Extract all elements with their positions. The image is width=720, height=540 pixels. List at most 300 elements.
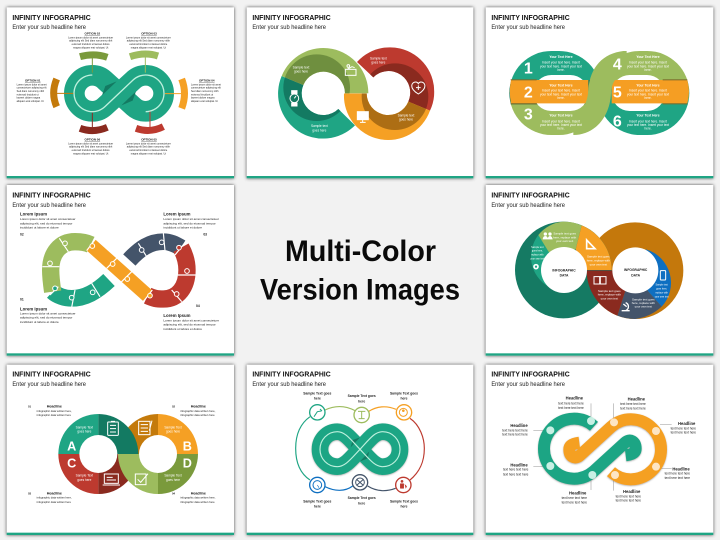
headline 01: infographic data written here, xyxy=(37,409,72,413)
icon: clipboard xyxy=(108,421,118,435)
node labels: Sample Text goes xyxy=(348,496,376,500)
headline bottom left xyxy=(562,491,587,505)
slide 8: headline loops xyxy=(486,365,713,535)
segment labels: Sample Text xyxy=(76,426,93,430)
headline bottom left: text here text here xyxy=(562,501,587,505)
headline 04: 04 xyxy=(172,491,176,495)
headline top right: Headline xyxy=(628,397,646,402)
text block 5: Insert your text here. Insert xyxy=(629,89,667,93)
node labels: Sample Text goes xyxy=(348,394,376,398)
node labels: here xyxy=(358,501,365,505)
side segment text: Sample text xyxy=(531,246,544,249)
text block 6: here. xyxy=(644,127,652,131)
headline 02: infographic data written here xyxy=(180,413,215,417)
icon: target xyxy=(534,265,538,269)
headline bottom left: text here text here xyxy=(562,496,587,500)
segment: green xyxy=(538,222,582,252)
side segment text: replace with xyxy=(531,254,544,257)
block 01 text xyxy=(20,298,76,324)
node labels: Sample Text goes xyxy=(390,391,418,395)
side segment text: goes here, xyxy=(656,287,668,290)
slide 1: option infinity xyxy=(7,7,234,178)
segment text: here, replace with xyxy=(632,301,655,305)
headline 04: infographic data written here xyxy=(180,500,215,504)
segment labels: goes here xyxy=(166,478,180,482)
title: INFINITY INFOGRAPHIC xyxy=(252,13,331,22)
leader lines xyxy=(533,403,672,491)
text block 2 xyxy=(540,83,582,100)
side segment text: your own text xyxy=(655,296,669,299)
node labels: here xyxy=(314,505,321,509)
headline bottom right: Headline xyxy=(623,489,641,494)
letters: C xyxy=(67,457,76,471)
slide 5: infographic data rings xyxy=(486,185,713,356)
block 04 text: Lorem Ipsum xyxy=(163,313,191,318)
loop holes xyxy=(533,75,665,111)
text block 3: here. xyxy=(557,127,565,131)
centre holes xyxy=(541,247,658,293)
node labels: here xyxy=(358,399,365,403)
infinity ribbon xyxy=(320,432,400,467)
text block 6: Your Text Here xyxy=(636,114,660,118)
option 02 text: euismod tincidunt ut laoreet dolore xyxy=(72,43,110,46)
option 02 text: magna aliquam erat volutpat. Ut xyxy=(73,46,109,49)
segment text: Sample text goes xyxy=(587,255,610,259)
option 06 text: Lorem ipsum dolor sit amet consectetuer xyxy=(68,142,113,145)
segment labels: Sample text xyxy=(398,113,414,117)
headline upper left xyxy=(502,423,528,437)
text block 3: Your Text Here xyxy=(549,114,573,118)
icon: monitor xyxy=(103,474,120,485)
option 06 text: euismod tincidunt ut laoreet dolore xyxy=(72,149,110,152)
hole labels: INFOGRAPHIC xyxy=(624,268,648,272)
slide 6: ABCD infinity xyxy=(7,365,234,535)
segment labels: goes here xyxy=(371,61,386,65)
option 03 text: adipiscing elit Sed diam nonummy nibh xyxy=(127,40,170,43)
option 06 text: magna aliquam erat volutpat. Ut xyxy=(73,152,109,155)
side segment text: goes here, xyxy=(532,250,543,253)
title: INFINITY INFOGRAPHIC xyxy=(12,191,91,200)
headline bottom right: text here text here xyxy=(616,499,641,503)
side segment text: replace with xyxy=(655,292,669,295)
option 04 text: laoreet dolore magna xyxy=(191,97,215,100)
orange bands xyxy=(510,80,689,103)
arrow option 05 xyxy=(136,112,163,130)
headline 03: infographic data written here, xyxy=(37,496,72,500)
option 02 text: OPTION 02 xyxy=(85,32,100,36)
option 02 text: Lorem ipsum dolor sit amet consectetuer xyxy=(68,36,113,39)
hole labels: DATA xyxy=(560,273,569,277)
headline 01: Headline xyxy=(47,404,62,408)
icon: notes xyxy=(139,421,152,435)
headline lower right: Headline xyxy=(672,466,690,471)
segment: blue xyxy=(635,249,671,307)
title: INFINITY INFOGRAPHIC xyxy=(491,13,570,22)
text block 6 xyxy=(627,114,669,131)
option 02 text xyxy=(68,32,113,49)
centre holes xyxy=(79,435,177,473)
icon: desk xyxy=(345,65,356,75)
infinity ribbon xyxy=(74,75,164,112)
icon: people xyxy=(543,232,553,239)
option 05 text: Lorem ipsum dolor sit amet consectetuer xyxy=(126,142,171,145)
headline 03: 03 xyxy=(28,491,32,495)
option 01 text: euismod tincidunt ut xyxy=(17,93,39,96)
subtitle: Enter your sub headline here xyxy=(491,24,565,31)
text block 2: Insert your text here. Insert xyxy=(542,89,580,93)
hole labels xyxy=(552,268,648,277)
title: INFINITY INFOGRAPHIC xyxy=(12,13,91,22)
quarter: dark red xyxy=(98,454,138,494)
block 01 text: adipiscing elit, sed do eiusmod tempor xyxy=(20,316,72,320)
puzzle knobs xyxy=(48,240,189,300)
subtitle: Enter your sub headline here xyxy=(252,24,326,31)
block 04 text: Lorem ipsum dolor sit amet consectetuer xyxy=(163,318,219,322)
subtitle: Enter your sub headline here xyxy=(491,381,565,388)
text block 3: Insert your text here. Insert xyxy=(542,119,580,123)
quarter: light green xyxy=(118,454,158,494)
option 04 text: Lorem ipsum dolor sit amet xyxy=(191,83,221,86)
node: machine xyxy=(354,407,369,423)
headline 03 xyxy=(28,491,72,504)
segment text xyxy=(553,231,655,309)
block 02 text: incididunt ut labore et dolore xyxy=(20,226,59,230)
option 05 text xyxy=(126,138,171,155)
text block 1: here. xyxy=(557,68,565,72)
segment: orange xyxy=(576,225,612,270)
side segment text: Sample text xyxy=(656,284,668,287)
block 01 text: Lorem Ipsum xyxy=(20,306,47,311)
headline 01: infographic data written here xyxy=(37,413,71,417)
arrow option 01 xyxy=(54,79,73,107)
icon: monitor xyxy=(357,112,368,122)
option 04 text: aliquam erat volutpat. Ut xyxy=(191,100,218,103)
headline top left xyxy=(558,396,584,410)
node labels xyxy=(303,391,418,509)
segment labels: Sample text xyxy=(293,65,309,69)
block 03 text: Lorem Ipsum xyxy=(163,212,191,217)
headline top right xyxy=(620,397,646,411)
band shading xyxy=(511,79,687,104)
segment labels: Sample text xyxy=(370,57,387,61)
headline top right: text here text here xyxy=(620,402,646,406)
icon: ruler triangle xyxy=(587,240,595,249)
segment text: here, replace with xyxy=(553,235,577,239)
option 04 text: consectetuer adipiscing elit xyxy=(191,87,221,90)
block 03 text: Lorem ipsum dolor sit amet consectetuer xyxy=(163,217,219,221)
option 06 text xyxy=(68,138,113,155)
text block 5: your text here. Insert your text xyxy=(627,92,669,96)
node: gauge xyxy=(310,477,325,493)
headline lower left: text here text here xyxy=(503,472,529,476)
quarter: red xyxy=(58,454,98,494)
node labels: Sample Text goes xyxy=(303,500,332,504)
text block 4: Your Text Here xyxy=(636,55,660,59)
puzzle ribbon xyxy=(42,233,196,307)
headline 01: 01 xyxy=(28,404,32,408)
headline 04 xyxy=(172,491,216,504)
block 02 text: adipiscing elit, sed do eiusmod tempor xyxy=(20,221,72,225)
option 06 text: adipiscing elit Sed diam nonummy nibh xyxy=(69,146,113,149)
segment: slate xyxy=(617,271,662,319)
headline top left: Headline xyxy=(566,396,584,401)
option 05 text: adipiscing elit Sed diam nonummy nibh xyxy=(127,146,170,149)
headline 03: infographic data written here xyxy=(37,500,71,504)
text block 2: Your Text Here xyxy=(549,83,573,87)
block 02 text xyxy=(20,212,76,237)
option 01 text: consectetuer adipiscing elit xyxy=(17,87,47,90)
node labels: here xyxy=(314,396,321,400)
subtitle: Enter your sub headline here xyxy=(12,202,86,209)
title: INFINITY INFOGRAPHIC xyxy=(491,191,570,200)
text block 1 xyxy=(540,55,582,72)
slide 2: four segment infinity xyxy=(247,7,473,178)
node labels: Sample Text goes xyxy=(390,500,418,504)
headline 04: infographic data written here, xyxy=(180,496,216,500)
segment text: here, replace with xyxy=(598,293,621,297)
headline upper right xyxy=(671,421,696,435)
headline 03: Headline xyxy=(47,491,62,495)
centre caption xyxy=(260,235,460,306)
node: gears xyxy=(352,475,368,490)
node labels: here xyxy=(400,505,408,509)
right loop xyxy=(604,51,690,135)
headline bottom right xyxy=(616,489,641,503)
option 01 text: aliquam erat volutpat. Ut xyxy=(17,100,44,103)
hole labels: DATA xyxy=(631,273,641,277)
headline top right: text here text here xyxy=(620,407,646,411)
option 02 text: adipiscing elit Sed diam nonummy nibh xyxy=(69,40,113,43)
headline top left: text here text here xyxy=(558,401,584,405)
segment text: Sample text goes xyxy=(553,231,576,235)
text block 4: Insert your text here. Insert xyxy=(629,61,667,65)
headline bottom left: Headline xyxy=(569,491,587,496)
numbers: 5 xyxy=(613,85,622,102)
segment text: Sample text goes xyxy=(632,297,655,301)
headline lower right: text here text here xyxy=(665,471,690,475)
orange ribbon xyxy=(569,419,661,479)
icon: phone xyxy=(660,271,666,280)
block 04 text xyxy=(163,304,219,331)
centre caption: Version Images xyxy=(260,274,460,306)
node labels: here xyxy=(400,396,408,400)
segment labels xyxy=(293,57,414,132)
arrow option 04 xyxy=(165,79,184,108)
option 05 text: euismod tincidunt ut laoreet dolore xyxy=(129,149,168,152)
headline 02: 02 xyxy=(172,404,176,408)
headline 02: Headline xyxy=(191,404,206,408)
segment labels: Sample text xyxy=(311,124,328,128)
headline lower left xyxy=(503,462,529,476)
block 01 text: 01 xyxy=(20,298,24,302)
segment labels: goes here xyxy=(399,117,413,121)
block 04 text: adipiscing elit, sed do eiusmod tempor xyxy=(163,323,216,327)
segment: dark red xyxy=(587,270,635,316)
text block 6: Insert your text here. Insert xyxy=(629,119,667,123)
headline top left: text here text here xyxy=(558,406,584,410)
segment labels: Sample Text xyxy=(164,474,182,478)
segment labels: goes here xyxy=(294,70,308,74)
icon: watch xyxy=(290,91,299,106)
numbers xyxy=(524,56,622,131)
headline lower left: text here text here xyxy=(503,468,529,472)
segment labels: goes here xyxy=(166,430,180,434)
headline upper right: Headline xyxy=(678,421,696,426)
s-curve band xyxy=(573,51,627,135)
option 03 text: Lorem ipsum dolor sit amet consectetuer xyxy=(126,36,171,39)
left loop xyxy=(509,51,594,135)
block 02 text: Lorem ipsum dolor sit amet consectetuer xyxy=(20,217,76,221)
headline 04: Headline xyxy=(191,491,206,495)
segment labels: goes here xyxy=(312,128,327,132)
segment text: your own text xyxy=(601,296,618,300)
centre caption: Multi-Color xyxy=(285,235,436,268)
option 03 text: magna aliquam erat volutpat. Ut xyxy=(131,46,166,49)
headline upper left: text here text here xyxy=(502,428,528,432)
text block 4: here. xyxy=(644,68,652,72)
headline lower right xyxy=(665,466,690,480)
title: INFINITY INFOGRAPHIC xyxy=(252,370,331,379)
text block 4: your text here. Insert your text xyxy=(627,64,669,68)
option 04 text: OPTION 04 xyxy=(199,79,215,83)
segment labels: Sample Text xyxy=(164,426,182,430)
numbers: 4 xyxy=(613,56,622,73)
segment labels: goes here xyxy=(77,430,92,434)
headline upper left: Headline xyxy=(510,423,528,428)
headline lower right: text here text here xyxy=(665,476,690,480)
option 01 text xyxy=(17,79,47,103)
option 04 text xyxy=(191,79,221,103)
option 01 text: OPTION 01 xyxy=(25,79,41,83)
text block 2: here. xyxy=(557,96,565,100)
segment labels: goes here xyxy=(77,478,92,482)
ribbon dots xyxy=(546,417,660,479)
block 01 text: incididunt ut labore et dolore xyxy=(20,320,59,324)
numbers: 1 xyxy=(524,61,533,78)
headline upper right: text here text here xyxy=(671,426,696,430)
icon: microscope xyxy=(622,303,630,311)
text block 4 xyxy=(627,55,669,72)
hole labels: INFOGRAPHIC xyxy=(552,269,576,273)
block 03 text: 03 xyxy=(203,233,207,237)
subtitle: Enter your sub headline here xyxy=(252,381,326,388)
option 05 text: magna aliquam erat volutpat. Ut xyxy=(131,152,166,155)
arrow option 03 xyxy=(130,54,158,73)
arrow option 02 xyxy=(80,55,107,73)
option 01 text: Lorem ipsum dolor sit amet xyxy=(17,83,47,86)
slide 3: numbered infinity xyxy=(486,7,713,178)
segment text: your own text xyxy=(635,305,652,309)
quarter: dark teal xyxy=(98,414,138,454)
subtitle: Enter your sub headline here xyxy=(491,202,565,209)
segment: teal xyxy=(278,76,355,139)
arrow option 06 xyxy=(80,113,107,131)
text block 5: here. xyxy=(644,96,652,100)
text block 6: your text here. Insert your text xyxy=(627,123,669,127)
subtitle: Enter your sub headline here xyxy=(12,381,86,388)
option 03 text: OPTION 03 xyxy=(141,32,157,36)
ring: amber xyxy=(587,222,683,319)
block 04 text: incididunt ut labore et dolore xyxy=(163,327,202,331)
text block 1: Insert your text here. Insert xyxy=(542,61,580,65)
quarter: amber xyxy=(158,414,198,454)
icon: check box xyxy=(135,474,148,485)
segment text: here, replace with xyxy=(587,258,610,262)
option 06 text: OPTION 06 xyxy=(85,138,100,142)
quarter: teal xyxy=(58,414,98,454)
headline upper left: text here text here xyxy=(502,433,528,437)
segment text: your own text xyxy=(556,239,574,243)
quarter: olive xyxy=(158,454,198,494)
headline 02: infographic data written here, xyxy=(180,409,216,413)
headline upper right: text here text here xyxy=(671,431,696,435)
slide 4: puzzle infinity xyxy=(7,185,234,356)
block 03 text xyxy=(163,212,219,237)
option 04 text: Sed diam nonummy nibh xyxy=(191,90,219,93)
letters xyxy=(67,439,192,471)
block 02 text: 02 xyxy=(20,233,24,237)
icon: book xyxy=(594,277,606,284)
letters: B xyxy=(183,439,192,453)
option 05 text: OPTION 05 xyxy=(141,138,157,142)
segment text: Sample text goes xyxy=(598,289,621,293)
block 01 text: Lorem ipsum dolor sit amet consectetuer xyxy=(20,312,76,316)
connector curves xyxy=(296,407,424,491)
segment text: your own text xyxy=(590,262,607,266)
segment: green xyxy=(282,48,368,94)
numbers: 6 xyxy=(613,114,622,131)
text block 3 xyxy=(540,114,582,131)
text block 1: your text here. Insert your text xyxy=(540,64,582,68)
option 01 text: laoreet dolore magna xyxy=(17,97,41,100)
text block 1: Your Text Here xyxy=(549,55,573,59)
node: person xyxy=(396,477,411,493)
text block 5: Your Text Here xyxy=(636,83,660,87)
block 03 text: adipiscing elit, sed do eiusmod tempor xyxy=(163,221,216,225)
text block 5 xyxy=(627,83,669,100)
segment: light teal xyxy=(531,235,563,287)
block 04 text: 04 xyxy=(196,304,200,308)
segment labels xyxy=(76,426,182,482)
side segment text xyxy=(530,246,669,299)
headline 01 xyxy=(28,404,72,417)
node labels: Sample Text goes xyxy=(303,391,332,395)
letters: A xyxy=(67,439,76,453)
title: INFINITY INFOGRAPHIC xyxy=(12,370,91,379)
headline 02 xyxy=(172,404,216,417)
headline lower left: Headline xyxy=(510,462,528,467)
node: robot arm xyxy=(310,405,325,420)
segment: orange xyxy=(344,93,430,140)
option 04 text: euismod tincidunt ut xyxy=(191,93,213,96)
option 03 text xyxy=(126,32,171,49)
headline bottom right: text here text here xyxy=(616,494,641,498)
segment labels: Sample Text xyxy=(76,474,93,478)
numbers: 2 xyxy=(524,85,533,102)
quarter: dark amber xyxy=(118,414,158,454)
block 02 text: Lorem Ipsum xyxy=(20,212,47,217)
slide 7: infinity with icon nodes xyxy=(247,365,473,535)
ring: dark teal xyxy=(515,222,612,318)
block 03 text: incididunt ut labore et dolore xyxy=(163,226,202,230)
option 03 text: euismod tincidunt ut laoreet dolore xyxy=(129,43,168,46)
text block 3: your text here. Insert your text xyxy=(540,123,582,127)
text block 2: your text here. Insert your text xyxy=(540,92,582,96)
option 01 text: Sed diam nonummy nibh xyxy=(17,90,45,93)
icon: heart xyxy=(412,82,425,94)
side segment text: your own text xyxy=(530,258,545,261)
title: INFINITY INFOGRAPHIC xyxy=(491,370,570,379)
